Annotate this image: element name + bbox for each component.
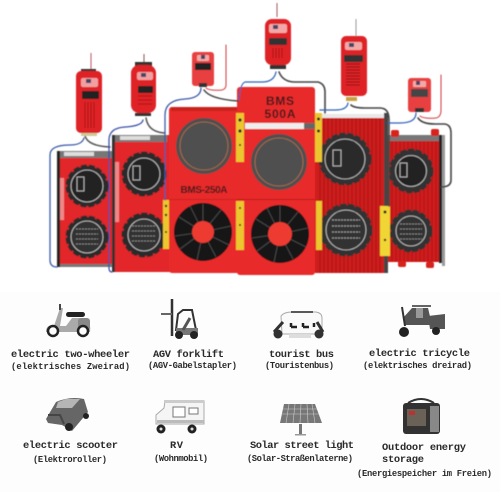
controller 4 bbox=[265, 3, 291, 69]
controller 5 bbox=[341, 19, 367, 101]
module 6 bbox=[388, 129, 445, 268]
label: electric scooter: (Elektroroller) bbox=[33, 455, 107, 465]
fan bbox=[251, 205, 309, 263]
fan bbox=[174, 203, 232, 261]
label: RV: RV bbox=[170, 440, 184, 452]
label: AGV forklift: AGV forklift bbox=[153, 349, 224, 361]
label: outdoor energy storage: (Energiespeicher im Freien) bbox=[357, 469, 492, 479]
label: solar street light: Solar street light bbox=[250, 440, 354, 452]
module 3: BMS-250A bbox=[163, 107, 240, 273]
label: electric scooter bbox=[23, 440, 118, 465]
panel: applications bbox=[11, 299, 492, 479]
label: outdoor energy storage: Outdoor energy bbox=[382, 442, 467, 454]
label: BMS-250A: BMS-250A bbox=[180, 185, 228, 196]
icon: electric car bbox=[46, 398, 89, 431]
icon: power station bbox=[403, 399, 440, 434]
label: electric tricycle bbox=[363, 348, 472, 371]
label: outdoor energy storage: storage bbox=[382, 454, 424, 466]
module 5 bbox=[315, 113, 388, 273]
icon: electric tricycle bbox=[399, 306, 445, 337]
controller 2 bbox=[131, 54, 156, 116]
label: AGV forklift bbox=[148, 349, 237, 371]
icon: solar panel bbox=[280, 404, 322, 436]
icon: forklift bbox=[161, 299, 198, 339]
label: electric tricycle: electric tricycle bbox=[369, 348, 470, 360]
icon: RV bbox=[156, 400, 204, 434]
controller 6: small box bbox=[408, 78, 431, 112]
module 2 bbox=[112, 135, 170, 272]
panel: BMS product group bbox=[50, 3, 451, 275]
label: tourist bus: tourist bus bbox=[269, 349, 334, 361]
module 4: BMS 500A bbox=[237, 87, 315, 275]
label: RV: (Wohnmobil) bbox=[154, 454, 208, 464]
label: BMS 500A: 500A bbox=[264, 107, 296, 121]
label: RV bbox=[154, 440, 208, 464]
wiring bbox=[50, 45, 451, 272]
label: electric two-wheeler bbox=[11, 349, 130, 372]
label: electric two-wheeler: (elektrisches Zweirad) bbox=[11, 362, 130, 372]
label: BMS 500A bbox=[264, 94, 296, 121]
controller 3: small box bbox=[192, 52, 214, 87]
yellow terminals bbox=[236, 113, 390, 256]
label: BMS 500A: BMS bbox=[266, 94, 294, 108]
module 1 bbox=[57, 151, 113, 267]
icon: scooter bbox=[46, 304, 90, 336]
label: solar street light bbox=[247, 440, 354, 464]
label: tourist bus: (Touristenbus) bbox=[265, 361, 334, 371]
label: solar street light: (Solar-Straßenlaterne) bbox=[247, 454, 353, 464]
icon: tourist bus bbox=[274, 312, 324, 338]
label: outdoor energy storage bbox=[357, 442, 492, 479]
controller 1 bbox=[76, 53, 102, 136]
label: electric tricycle: (elektrisches dreirad) bbox=[363, 361, 472, 371]
label: tourist bus bbox=[265, 349, 334, 371]
label: AGV forklift: (AGV-Gabelstapler) bbox=[148, 361, 237, 371]
label: electric scooter: electric scooter bbox=[23, 440, 118, 452]
label: electric two-wheeler: electric two-wheeler bbox=[11, 349, 130, 361]
